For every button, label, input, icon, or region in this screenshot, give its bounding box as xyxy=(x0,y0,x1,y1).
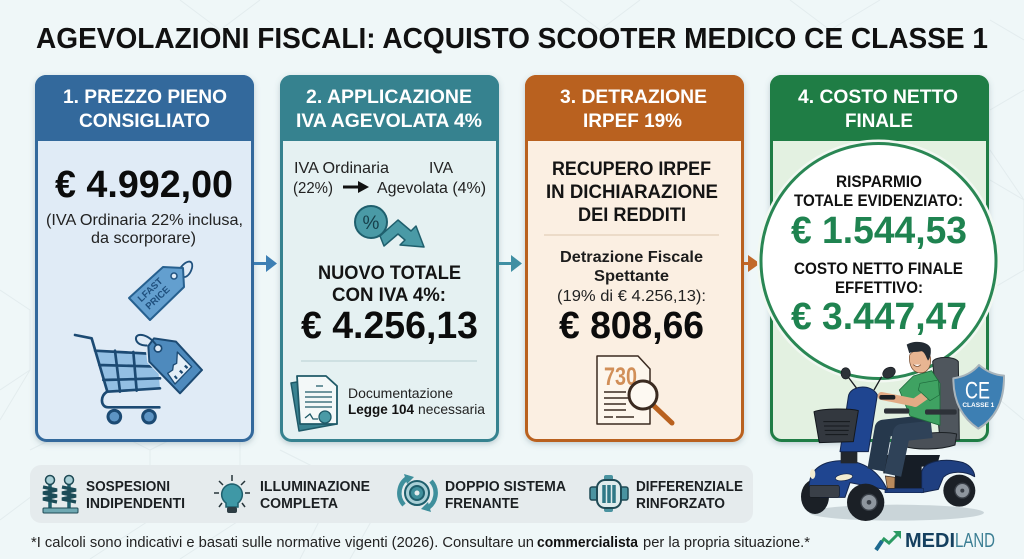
price: savings: € 1.544,53 xyxy=(791,210,967,252)
icon: CE classe 1 shield: CLASSE 1 xyxy=(962,402,995,409)
text: net cost label: EFFETTIVO: xyxy=(835,278,923,297)
heading: card 1: 1. PREZZO PIENO xyxy=(63,86,227,108)
note: VAT included: da scorporare) xyxy=(91,230,196,247)
logo: Mediland: LAND xyxy=(955,530,995,552)
icon: CE classe 1 shield xyxy=(953,365,1004,429)
note: VAT included: (IVA Ordinaria 22% inclusa, xyxy=(46,212,243,229)
icon: list price tag: PRICE xyxy=(144,284,172,312)
feature: reinforced differential: RINFORZATO xyxy=(636,496,725,512)
title: AGEVOLAZIONI FISCALI: ACQUISTO SCOOTER MEDICO CE CLASSE 1 xyxy=(36,23,988,55)
heading: card 2: IVA AGEVOLATA 4% xyxy=(296,110,482,132)
logo: Mediland: MEDI xyxy=(905,530,955,552)
panel: 4 costo netto finale xyxy=(770,75,989,442)
text: VAT 22% to 4%: (22%) xyxy=(293,180,333,197)
panel: 3 detrazione IRPEF xyxy=(525,75,744,442)
front wheels xyxy=(847,484,884,521)
icon: shopping cart with tag xyxy=(75,335,205,423)
feature: dual braking system: DOPPIO SISTEMA xyxy=(445,479,567,495)
callout: savings circle xyxy=(758,141,998,381)
icon: form 730 with magnifier: 730 xyxy=(604,363,637,391)
icon: CE classe 1 shield: CE xyxy=(965,377,990,404)
logo: Mediland xyxy=(876,530,995,552)
note: Legge 104 documentation: necessaria xyxy=(418,401,485,417)
head xyxy=(909,351,931,373)
arrow: card 1 to card 2 xyxy=(254,255,277,272)
note: Legge 104 documentation: Documentazione xyxy=(348,385,453,401)
heading: card 2 xyxy=(296,86,482,132)
footnote: *I calcoli sono indicativi e basati sulle normative vigenti (2026). Consultare un xyxy=(31,534,534,551)
text: savings label xyxy=(794,172,963,210)
note: Legge 104 documentation xyxy=(348,385,485,417)
arm xyxy=(882,396,915,403)
text: new total label: CON IVA 4%: xyxy=(332,285,446,306)
text: deduction explanation xyxy=(557,249,706,305)
basket xyxy=(814,409,858,443)
text: net cost label: COSTO NETTO FINALE xyxy=(794,259,963,278)
price: new total: € 4.256,13 xyxy=(301,305,478,347)
text: VAT 22% to 4% xyxy=(293,160,486,197)
icon: percent with falling arrow: % xyxy=(363,213,380,234)
panel: 2 applicazione IVA agevolata xyxy=(280,75,499,442)
seat back xyxy=(933,357,959,440)
text: VAT 22% to 4%: IVA Ordinaria xyxy=(294,160,389,177)
text: savings label: TOTALE EVIDENZIATO: xyxy=(794,191,963,210)
heading: card 2: 2. APPLICAZIONE xyxy=(306,86,472,108)
floor xyxy=(885,488,923,493)
seat xyxy=(905,433,957,449)
text: net cost label xyxy=(794,259,963,297)
feature: independent suspension: INDIPENDENTI xyxy=(86,496,185,512)
feature: independent suspension: SOSPESIONI xyxy=(86,479,170,495)
feature: dual braking system: FRENANTE xyxy=(445,496,519,512)
shoe xyxy=(885,476,895,488)
rear-left wheel xyxy=(801,479,829,514)
heading: card 4 xyxy=(798,86,958,132)
feature: independent suspension xyxy=(43,476,185,513)
icon: documents xyxy=(291,376,337,431)
arrow: card 3 to card 4 xyxy=(744,255,760,272)
price: deduction: € 808,66 xyxy=(559,305,704,347)
illustration: man on mobility scooter xyxy=(801,342,984,521)
handlebar xyxy=(879,395,895,400)
seat post and frame xyxy=(883,455,940,488)
far leg xyxy=(876,423,930,470)
text: deduction explanation: (19% di € 4.256,13): xyxy=(557,288,706,305)
icon: percent with falling arrow xyxy=(355,206,424,247)
feature: reinforced differential xyxy=(590,475,743,512)
text: new total label xyxy=(318,263,461,306)
arrow: card 2 to card 3 xyxy=(499,255,522,272)
footnote: commercialista xyxy=(537,534,639,551)
heading: card 4: FINALE xyxy=(845,110,913,132)
price: net cost: € 3.447,47 xyxy=(791,296,967,338)
armrests xyxy=(884,408,909,414)
footnote: per la propria situazione.* xyxy=(643,534,810,551)
feature: full lighting: COMPLETA xyxy=(260,496,339,512)
footnote xyxy=(31,534,810,551)
heading: card 3: IRPEF 19% xyxy=(583,110,682,132)
text: savings label: RISPARMIO xyxy=(836,172,922,191)
price: full price: € 4.992,00 xyxy=(55,164,233,206)
text: VAT 22% to 4%: IVA xyxy=(429,160,453,177)
feature: reinforced differential: DIFFERENZIALE xyxy=(636,479,743,495)
heading: card 1 xyxy=(63,86,227,132)
icon: list price tag xyxy=(129,262,192,320)
text: VAT 22% to 4%: Agevolata (4%) xyxy=(377,180,486,197)
arrow: rate change xyxy=(343,181,369,193)
note: Legge 104 documentation: Legge 104 xyxy=(348,401,414,417)
panel: 1 prezzo pieno consigliato xyxy=(35,75,254,442)
heading: card 4: 4. COSTO NETTO xyxy=(798,86,958,108)
icon: form 730 with magnifier xyxy=(597,356,672,424)
heading: card 1: CONSIGLIATO xyxy=(79,110,210,132)
text: IRPEF recovery: IN DICHIARAZIONE xyxy=(546,182,718,203)
mirrors xyxy=(847,375,882,390)
heading: card 3 xyxy=(560,86,707,132)
note: VAT included xyxy=(46,212,243,247)
heading: card 3: 3. DETRAZIONE xyxy=(560,86,707,108)
front fender xyxy=(809,461,887,497)
rear fender xyxy=(922,460,975,493)
icon: list price tag: LFAST xyxy=(136,276,165,305)
steering column xyxy=(841,448,857,463)
feature: full lighting: ILLUMINAZIONE xyxy=(260,479,370,495)
text: deduction explanation: Detrazione Fiscale xyxy=(560,249,703,266)
text: new total label: NUOVO TOTALE xyxy=(318,263,461,284)
feature: dual braking system xyxy=(399,474,567,512)
text: deduction explanation: Spettante xyxy=(594,268,669,285)
feature bar xyxy=(30,465,753,523)
text: IRPEF recovery: RECUPERO IRPEF xyxy=(552,159,711,180)
feature: full lighting xyxy=(214,475,370,513)
text: IRPEF recovery: DEI REDDITI xyxy=(578,205,686,226)
text: IRPEF recovery xyxy=(546,159,718,226)
near leg xyxy=(893,429,932,475)
torso xyxy=(899,371,940,425)
